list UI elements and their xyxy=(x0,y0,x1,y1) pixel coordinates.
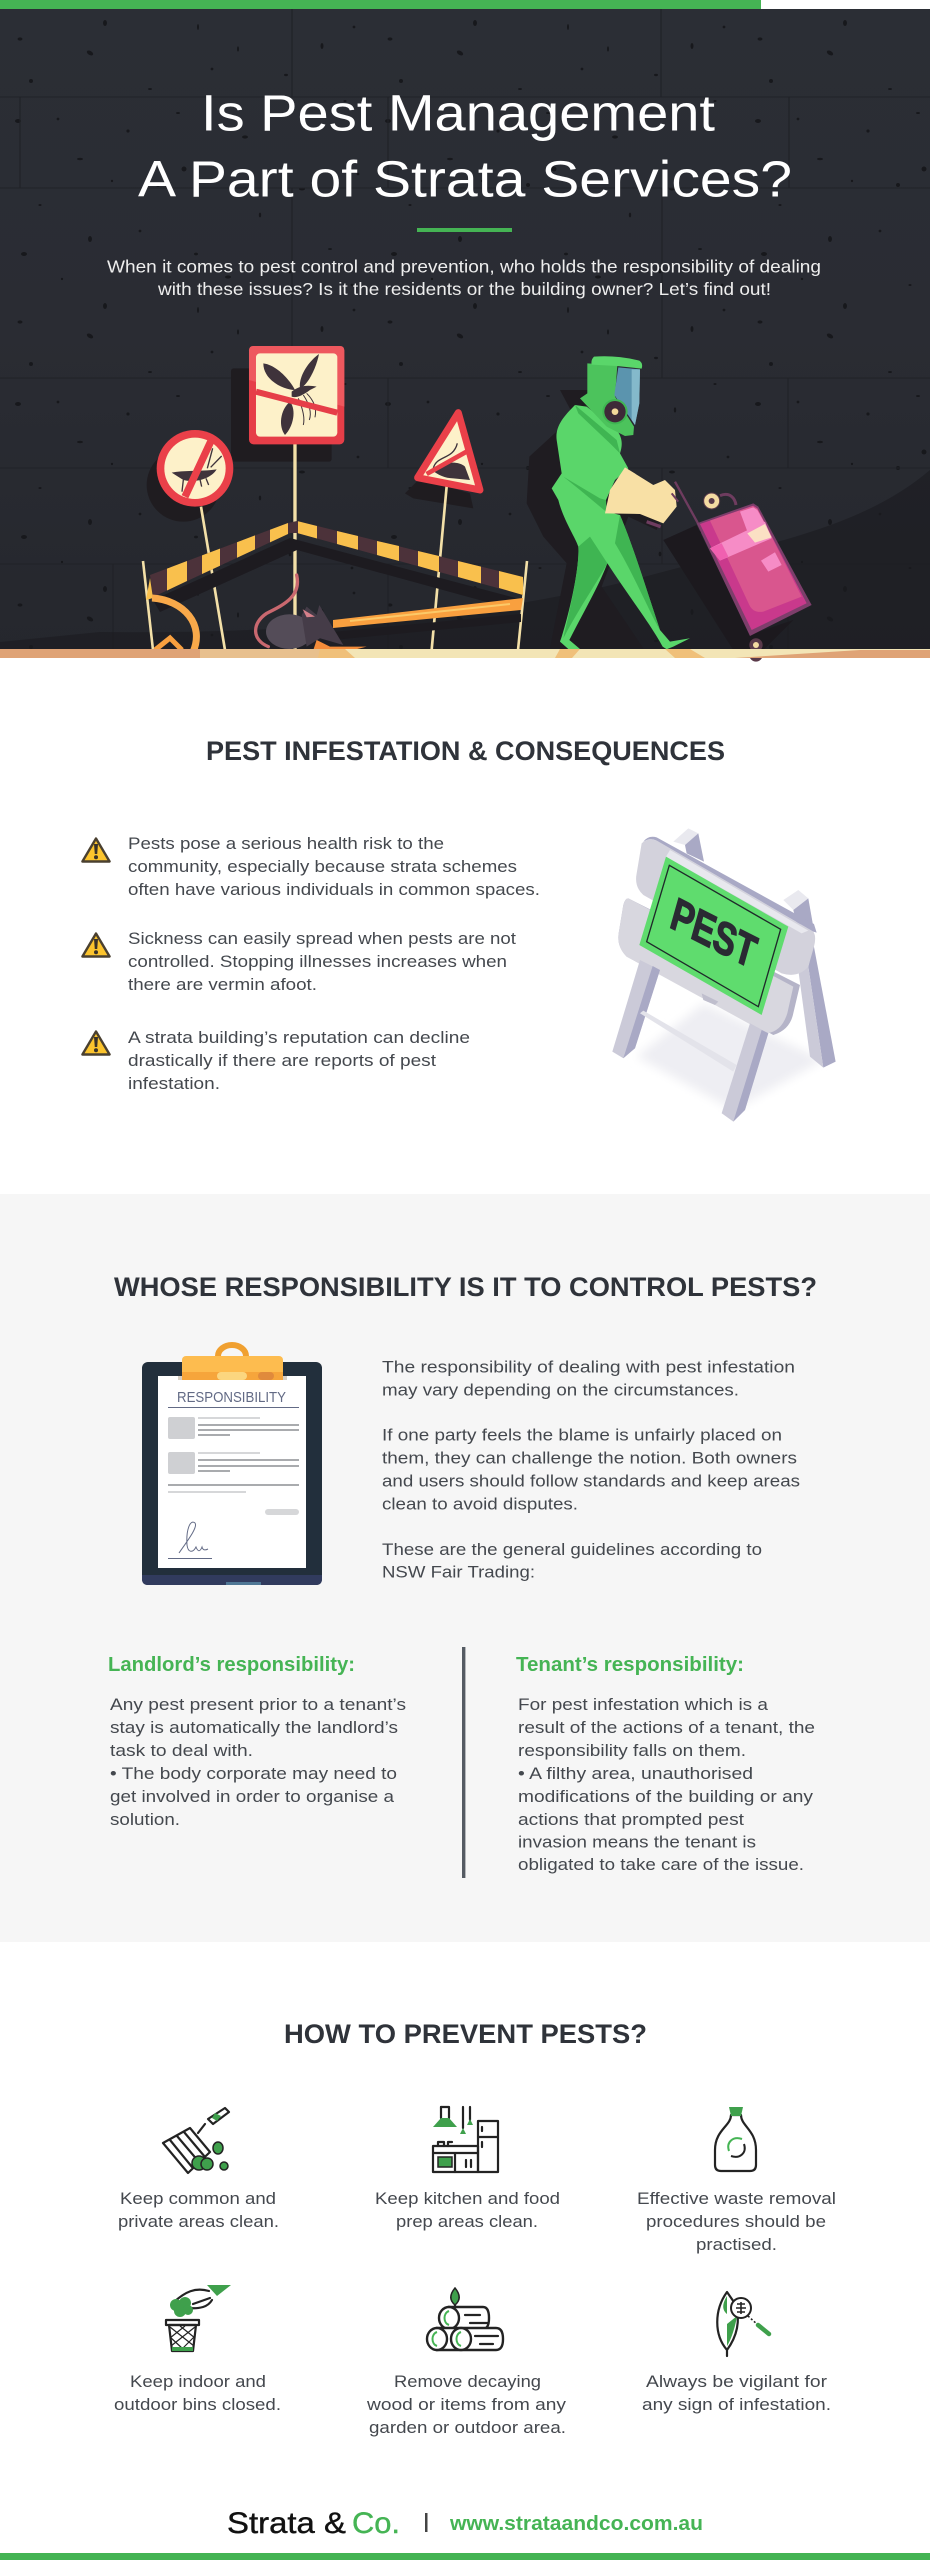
hero panel xyxy=(0,0,930,662)
warning item 1: Pests pose a serious health risk to the xyxy=(128,834,444,853)
intro paragraphs: NSW Fair Trading: xyxy=(382,1562,535,1582)
tip: waste removal: Effective waste removal xyxy=(637,2189,836,2208)
logo: Co. xyxy=(352,2507,400,2540)
tip: waste removal xyxy=(637,2107,836,2254)
subtitle xyxy=(107,256,821,299)
column: landlord: stay is automatically the landlord’s xyxy=(110,1718,398,1737)
title underline xyxy=(417,228,512,232)
clipboard illustration: RESPONSIBILITY xyxy=(177,1390,286,1406)
column divider xyxy=(462,1647,465,1878)
intro paragraphs: and users should follow standards and keep areas xyxy=(382,1472,800,1490)
heading: how to prevent: HOW TO PREVENT PESTS? xyxy=(284,2019,647,2049)
warning item 3: drastically if there are reports of pest xyxy=(128,1051,436,1070)
column: landlord: • The body corporate may need to xyxy=(110,1764,397,1783)
tip: bins: outdoor bins closed. xyxy=(114,2395,281,2414)
tip: kitchen: Keep kitchen and food xyxy=(375,2189,560,2208)
warning item 2: controlled. Stopping illnesses increases when xyxy=(128,952,507,971)
tip: waste removal: practised. xyxy=(696,2235,777,2254)
footer xyxy=(0,2507,930,2560)
tip: bins: Keep indoor and xyxy=(130,2372,266,2391)
tip: common areas: Keep common and xyxy=(120,2189,276,2208)
section: whose responsibility xyxy=(0,1194,930,1942)
sign: no mosquito xyxy=(231,346,344,650)
tip: decaying wood: Remove decaying xyxy=(394,2372,541,2391)
sign: no rats xyxy=(405,413,480,650)
illustration: pest sign: PEST xyxy=(666,887,762,978)
column: tenant: For pest infestation which is a xyxy=(518,1695,769,1714)
title: A Part of Strata Services? xyxy=(138,150,792,208)
warning item 3: infestation. xyxy=(128,1074,220,1093)
tip: kitchen: prep areas clean. xyxy=(396,2212,538,2231)
intro paragraphs: These are the general guidelines according to xyxy=(382,1540,762,1559)
trolley xyxy=(663,493,812,662)
subtitle: When it comes to pest control and prevention, who holds the responsibility of dealing xyxy=(107,256,821,276)
warning item 1: often have various individuals in common spaces. xyxy=(128,880,540,899)
heading: whose responsibility: WHOSE RESPONSIBILITY IS IT TO CONTROL PESTS? xyxy=(114,1272,817,1302)
tip: decaying wood: wood or items from any xyxy=(366,2395,567,2414)
column: tenant: responsibility falls on them. xyxy=(518,1741,746,1760)
intro paragraphs xyxy=(382,1358,800,1582)
intro paragraphs: If one party feels the blame is unfairly placed on xyxy=(382,1426,782,1444)
column: tenant: invasion means the tenant is xyxy=(518,1832,756,1852)
intro paragraphs: clean to avoid disputes. xyxy=(382,1494,578,1514)
barrier tape xyxy=(143,521,527,652)
rat xyxy=(256,575,367,650)
column: tenant: obligated to take care of the issue. xyxy=(518,1855,804,1874)
warning item 2: there are vermin afoot. xyxy=(128,975,317,994)
column: tenant: modifications of the building or any xyxy=(518,1787,814,1806)
column: landlord xyxy=(108,1654,406,1829)
tip: kitchen xyxy=(375,2107,560,2231)
tip: common areas: private areas clean. xyxy=(118,2212,279,2231)
tip: common areas xyxy=(118,2108,279,2231)
title xyxy=(138,84,792,208)
column: tenant xyxy=(516,1654,815,1874)
tip: vigilance: any sign of infestation. xyxy=(642,2395,831,2414)
section: how to prevent xyxy=(114,2019,836,2437)
website url: www.strataandco.com.au xyxy=(449,2513,703,2535)
section: pest infestation xyxy=(82,736,836,1122)
column: landlord: solution. xyxy=(110,1810,180,1829)
warning item 1: community, especially because strata schemes xyxy=(128,857,517,876)
intro paragraphs: them, they can challenge the notion. Both owners xyxy=(382,1448,797,1468)
column: tenant: actions that prompted pest xyxy=(518,1810,744,1829)
clipboard illustration xyxy=(142,1345,322,1585)
warning item 3 xyxy=(82,1028,470,1093)
column: tenant: Tenant’s responsibility: xyxy=(516,1654,744,1676)
hazmat worker xyxy=(527,356,698,649)
column: landlord: task to deal with. xyxy=(110,1741,253,1760)
column: landlord: Landlord’s responsibility: xyxy=(108,1654,355,1676)
tip: waste removal: procedures should be xyxy=(646,2212,826,2231)
tip: vigilance xyxy=(642,2292,831,2414)
floor xyxy=(0,649,930,658)
title: Is Pest Management xyxy=(201,84,715,142)
tip: bins xyxy=(114,2285,281,2414)
tip: vigilance: Always be vigilant for xyxy=(646,2372,827,2391)
column: tenant: • A filthy area, unauthorised xyxy=(518,1764,753,1783)
tip: decaying wood: garden or outdoor area. xyxy=(369,2418,566,2437)
intro paragraphs: may vary depending on the circumstances. xyxy=(382,1380,739,1400)
column: tenant: result of the actions of a tenant, the xyxy=(518,1718,815,1737)
column: landlord: Any pest present prior to a tenant’s xyxy=(110,1695,406,1714)
sign: no cockroach xyxy=(147,430,233,650)
logo: Strata & xyxy=(227,2507,346,2540)
illustration: pest sign xyxy=(612,828,836,1122)
warning item 1 xyxy=(82,834,540,899)
column: landlord: get involved in order to organise a xyxy=(110,1787,395,1806)
bottom bar xyxy=(0,2553,930,2560)
tip: decaying wood xyxy=(366,2288,567,2437)
heading: pest infestation: PEST INFESTATION & CONSEQUENCES xyxy=(206,736,725,766)
subtitle: with these issues? Is it the residents or the building owner? Let’s find out! xyxy=(157,279,771,299)
intro paragraphs: The responsibility of dealing with pest infestation xyxy=(382,1358,795,1376)
warning item 2: Sickness can easily spread when pests are not xyxy=(128,929,516,948)
warning item 3: A strata building’s reputation can decline xyxy=(128,1028,470,1047)
top progress bar xyxy=(0,0,930,9)
footer divider xyxy=(425,2513,428,2532)
warning item 2 xyxy=(82,929,516,994)
